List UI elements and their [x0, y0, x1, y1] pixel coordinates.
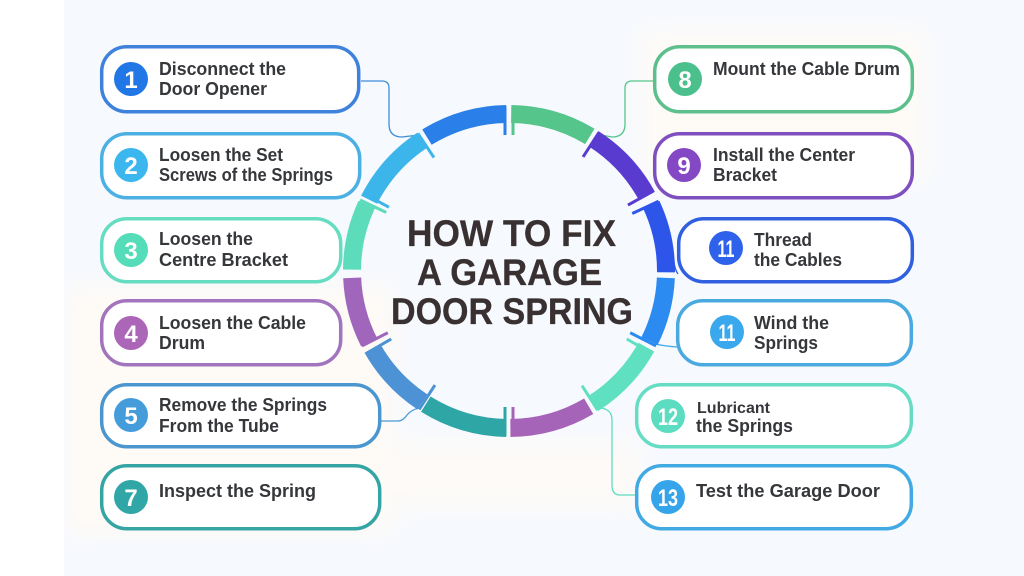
- step 2 card: [102, 134, 360, 198]
- step 1 card: [102, 47, 359, 112]
- step 1 card: Door Opener: [159, 79, 267, 99]
- step 9 card: 9: [677, 153, 691, 180]
- step 7 card: [102, 466, 380, 529]
- progress ring: [291, 53, 727, 489]
- step 8 card: Mount the Cable Drum: [713, 59, 900, 79]
- step 12 card: 12: [658, 404, 678, 431]
- step 11 card: wind the springs: Springs: [754, 333, 818, 353]
- step 8 card: 8: [678, 67, 692, 94]
- step 11 card: thread the cables: the Cables: [754, 250, 842, 270]
- step 5 card: Remove the Springs: [159, 395, 327, 415]
- step 8 card: [655, 47, 912, 112]
- step 5 card: From the Tube: [159, 416, 279, 436]
- title: HOW TO FIX: [407, 213, 616, 254]
- step 12 card: Lubricant: [697, 400, 771, 417]
- step 11 card: wind the springs: [678, 301, 911, 365]
- step 5 card: [102, 385, 380, 447]
- step 3 card: 3: [124, 238, 138, 265]
- step 12 card: [637, 385, 911, 447]
- step 13 card: 13: [658, 485, 678, 512]
- step 3 card: Loosen the: [159, 229, 253, 249]
- step 9 card: Install the Center: [713, 145, 855, 165]
- step 13 card: [637, 466, 911, 529]
- step 7 card: Inspect the Spring: [159, 481, 316, 501]
- title: [391, 213, 633, 332]
- step 9 card: Bracket: [713, 165, 777, 185]
- step 3 card: Centre Bracket: [159, 250, 288, 270]
- step 13 card: Test the Garage Door: [696, 481, 880, 501]
- connector lines: [361, 81, 678, 495]
- step 2 card: Loosen the Set: [159, 145, 283, 165]
- step 5 card: 5: [124, 403, 138, 430]
- step 2 card: 2: [124, 153, 138, 180]
- step 11 card: thread the cables: [679, 219, 912, 282]
- step 4 card: [102, 301, 341, 365]
- step 4 card: Loosen the Cable: [159, 313, 306, 333]
- step 11 card: wind the springs: 11: [718, 320, 736, 347]
- step 1 card: 1: [124, 67, 138, 94]
- step 4 card: Drum: [159, 333, 205, 353]
- step 9 card: [655, 134, 912, 198]
- step 11 card: thread the cables: Thread: [754, 230, 812, 250]
- step 12 card: the Springs: [696, 416, 793, 436]
- step 2 card: Screws of the Springs: [159, 165, 333, 185]
- step 1 card: Disconnect the: [159, 59, 286, 79]
- title: DOOR SPRING: [391, 291, 633, 332]
- step 4 card: 4: [124, 321, 138, 348]
- title: A GARAGE: [417, 252, 602, 293]
- step 3 card: [102, 219, 341, 282]
- step 11 card: wind the springs: Wind the: [754, 313, 829, 333]
- step 11 card: thread the cables: 11: [718, 236, 734, 263]
- step 7 card: 7: [124, 485, 138, 512]
